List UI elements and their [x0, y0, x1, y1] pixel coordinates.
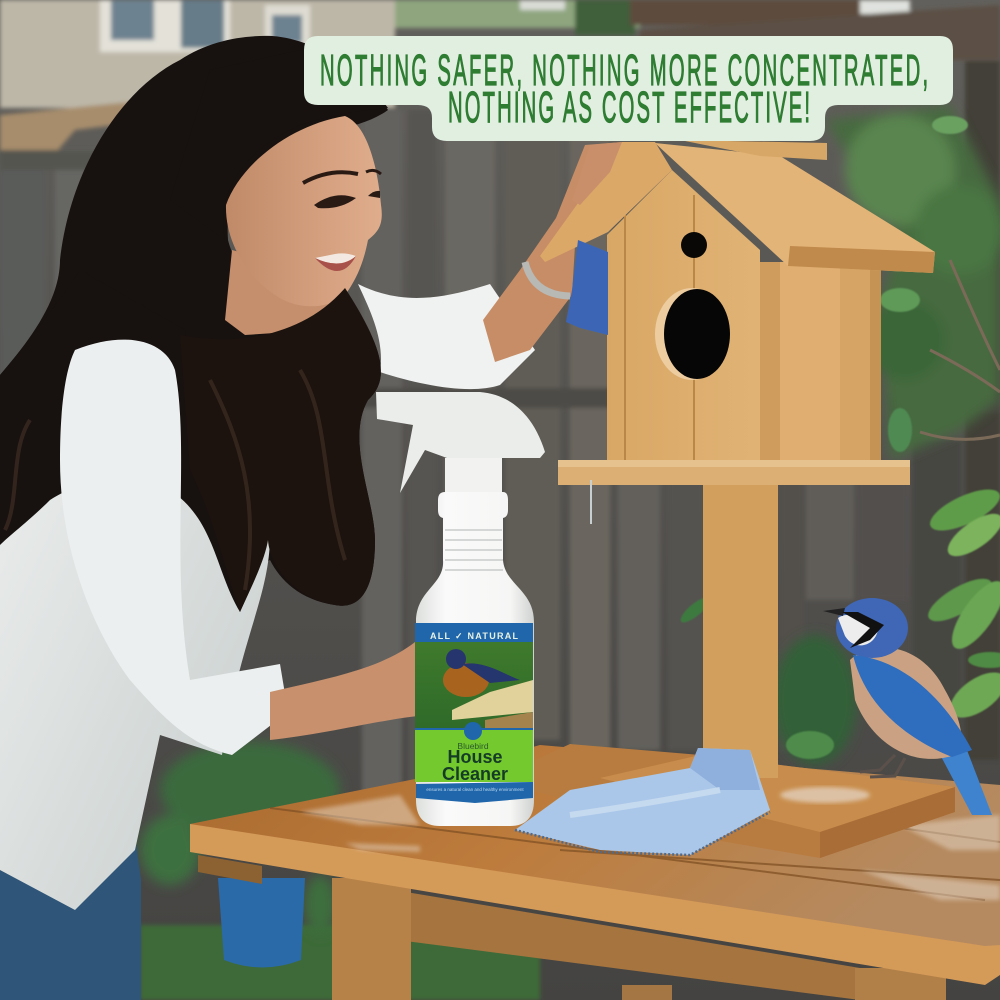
neck [225, 250, 345, 335]
forearm lower [270, 642, 418, 740]
board under post [530, 744, 955, 858]
eye stripe [842, 612, 884, 648]
head [836, 598, 908, 658]
label green lower [415, 722, 533, 784]
roof [540, 140, 935, 273]
shirt body [0, 332, 270, 910]
legs [860, 755, 905, 777]
label bird photo [443, 649, 533, 733]
eyes and mouth [303, 170, 381, 271]
label bottom band: ensures a natural clean and healthy environment [426, 787, 524, 792]
post [703, 484, 778, 778]
tail [935, 745, 992, 815]
table planks [270, 808, 1000, 900]
icon: leaves at right [677, 116, 1000, 759]
woman [0, 36, 622, 1000]
sleeve upper [358, 284, 535, 389]
headline text [320, 46, 928, 132]
banner background [304, 36, 953, 141]
hair back [0, 36, 388, 612]
headline text: NOTHING AS COST EFFECTIVE! [448, 83, 810, 132]
label green lower: House [447, 747, 503, 767]
white face [838, 615, 878, 645]
body [850, 648, 962, 759]
table legs and apron [198, 855, 946, 1000]
label green lower: Bluebird [457, 741, 489, 751]
bottle neck and shoulder [416, 492, 534, 826]
background: house and sky [0, 0, 1000, 170]
table with wet wood surface [190, 745, 1000, 1000]
table top [190, 745, 1000, 950]
foliage: lower left plants, grass [140, 742, 540, 1000]
face [226, 116, 382, 306]
birdhouse [540, 140, 935, 778]
bracelet [525, 262, 570, 296]
small hole [681, 232, 707, 258]
wet patches [300, 795, 1000, 900]
hair highlights [5, 370, 345, 590]
hair over face edge [170, 50, 388, 240]
raised arm and hand [483, 142, 622, 362]
hand fingers over roof edge [572, 142, 622, 205]
foliage: right garden [677, 105, 1000, 765]
cap collar [445, 458, 502, 494]
large entrance hole [655, 288, 730, 380]
hair over shoulder [0, 270, 262, 612]
blue cloth [566, 240, 608, 335]
house left face [607, 170, 760, 460]
table front edge [190, 824, 1000, 985]
shirt lower sleeve [60, 340, 288, 755]
neck ribs [445, 530, 503, 570]
label green photo [415, 640, 533, 730]
wing [853, 655, 972, 757]
label header band: ALL ✓ NATURAL [430, 631, 518, 641]
towel [515, 748, 770, 855]
label green lower: Cleaner [442, 764, 508, 784]
bluebird [823, 598, 992, 815]
trigger sprayer [376, 392, 545, 493]
platform [558, 460, 910, 485]
water drip [590, 480, 592, 524]
label bottom band [416, 782, 533, 803]
headline text: NOTHING SAFER, NOTHING MORE CONCENTRATED, [320, 46, 928, 95]
label header band [415, 623, 533, 642]
jeans [0, 820, 141, 1000]
product bottle [376, 392, 545, 826]
headline banner [304, 36, 953, 141]
plank lines [625, 195, 694, 460]
hair right lock [180, 288, 381, 612]
house right face [760, 262, 881, 460]
blue bucket [218, 878, 305, 968]
beak [823, 608, 845, 616]
